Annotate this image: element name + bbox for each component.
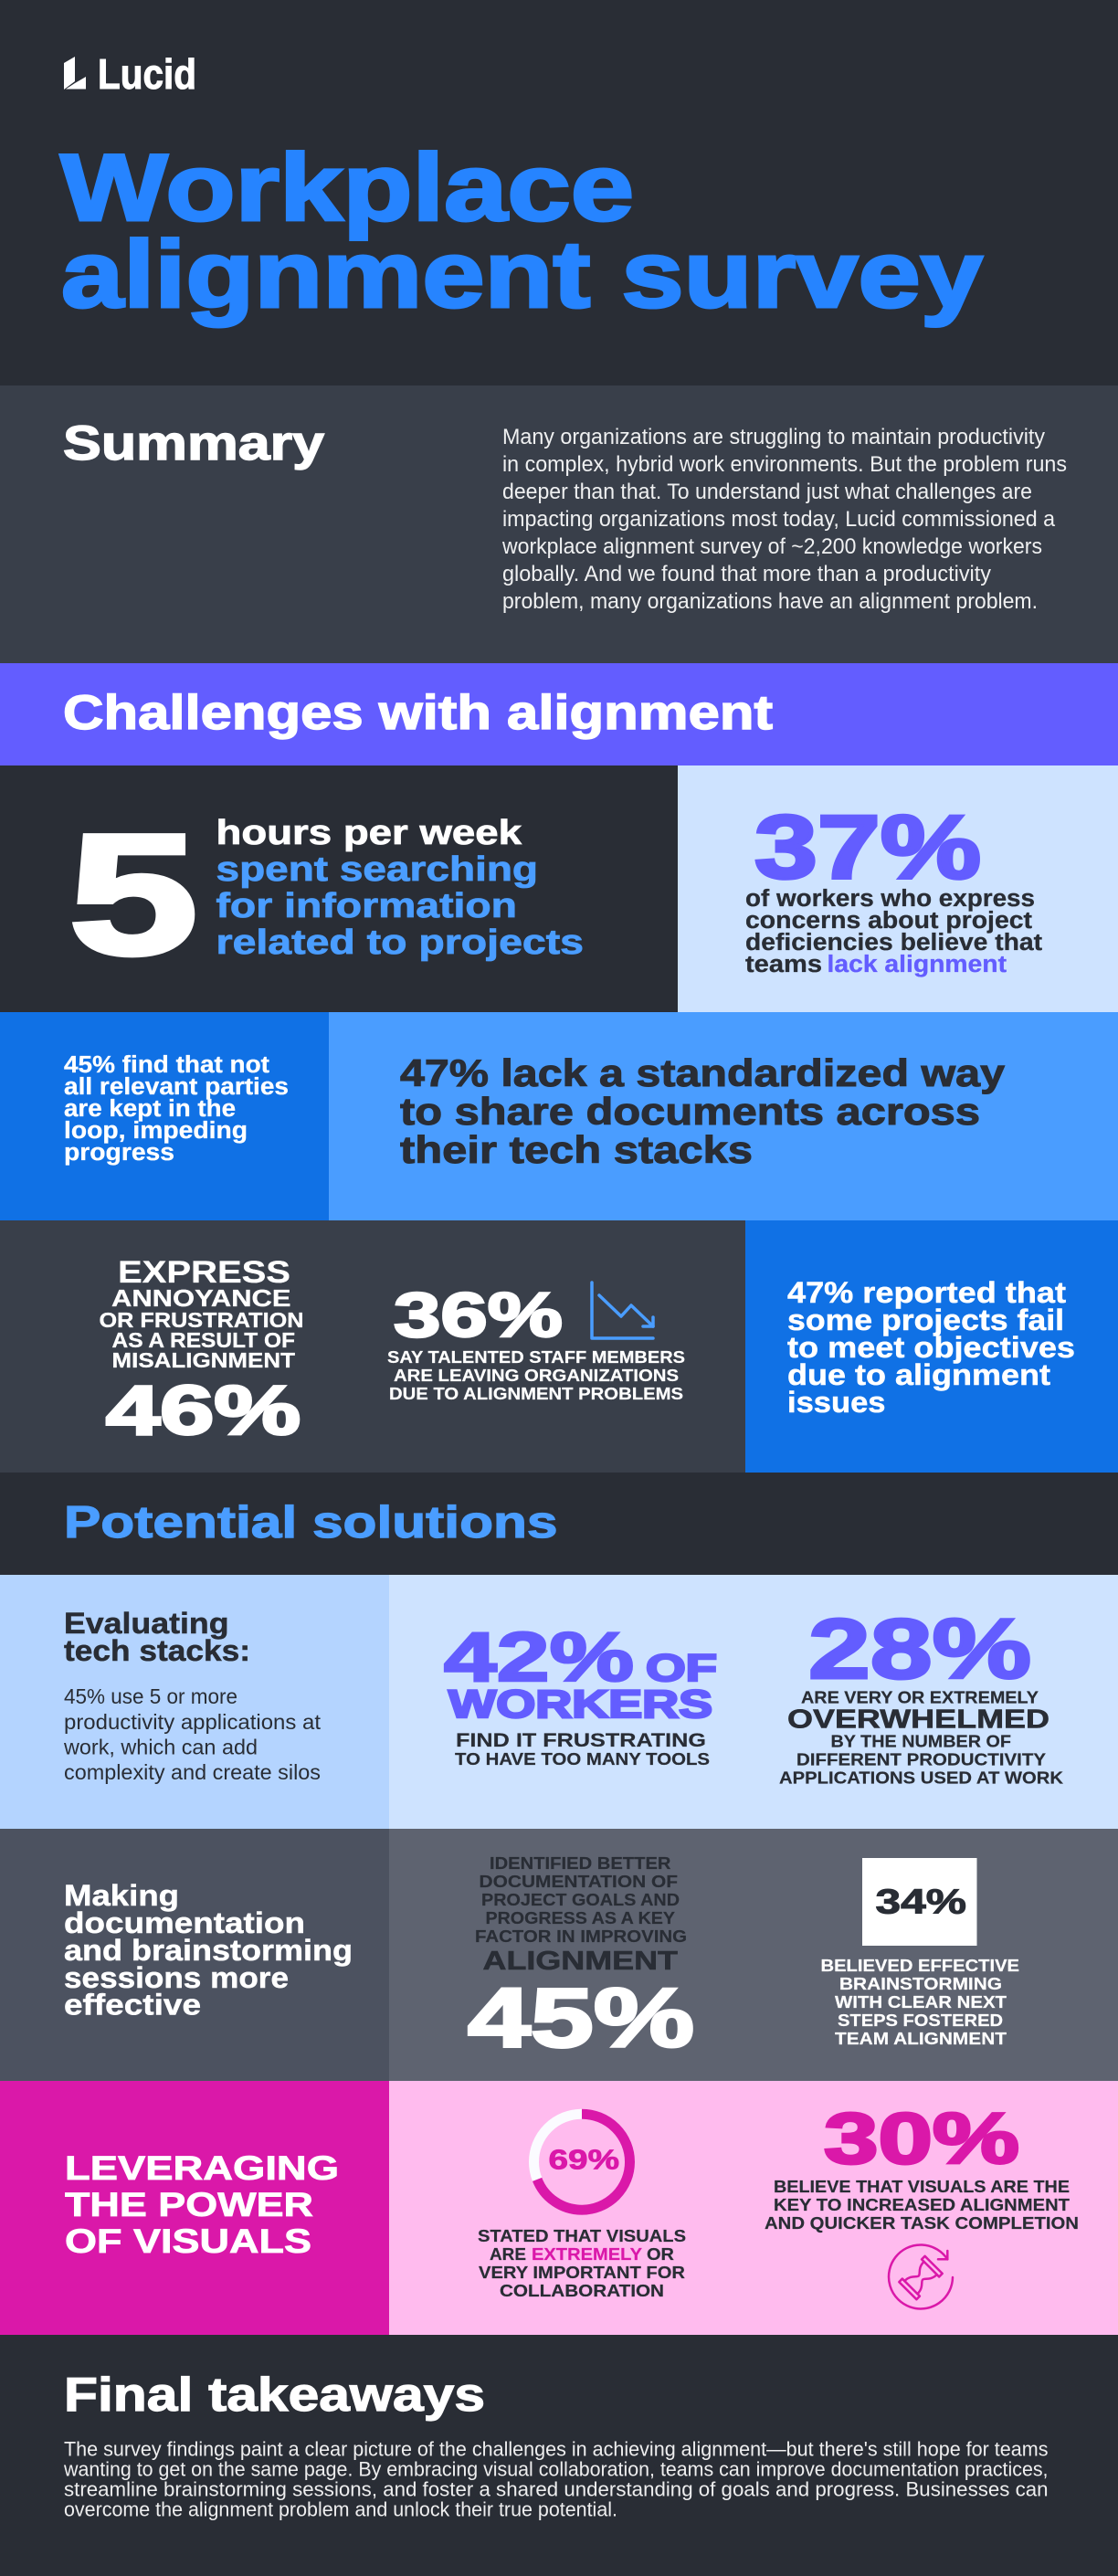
text: hours per week: hours per week xyxy=(216,814,522,852)
panel: misalignment stats xyxy=(0,1220,745,1473)
text: key to alignment: BELIEVE THAT VISUALS ARE THE xyxy=(774,2177,1070,2196)
text: lack alignment xyxy=(745,886,1043,977)
text: talented staff: SAY TALENTED STAFF MEMBERS xyxy=(387,1347,685,1367)
panel: final takeaways xyxy=(0,2335,1118,2576)
stat: 5: 5 xyxy=(69,798,198,990)
stat: 28%: 28% xyxy=(808,1601,1031,1696)
text: key to alignment xyxy=(765,2177,1079,2233)
text: hours per week xyxy=(216,814,584,962)
panel: 47 percent document sharing: 47% lack a standardized way xyxy=(400,1051,1006,1094)
text: better documentation: PROJECT GOALS AND xyxy=(481,1890,680,1909)
text: too many tools xyxy=(455,1729,710,1768)
takeaways text xyxy=(63,2437,1049,2521)
text: 5 or more applications: complexity and create silos xyxy=(64,1760,321,1784)
stat: 37%: 37% xyxy=(754,797,981,897)
panel: 47 percent projects fail: issues xyxy=(787,1386,886,1419)
takeaways text: The survey findings paint a clear picture of the challenges in achieving alignment—but there's still hope for teams xyxy=(64,2437,1049,2461)
logo: Lucid: Lucid xyxy=(98,50,196,98)
text: talented staff: ARE LEAVING ORGANIZATIONS xyxy=(394,1366,679,1385)
takeaways text: overcome the alignment problem and unlock their true potential. xyxy=(64,2497,617,2521)
text: better documentation: IDENTIFIED BETTER xyxy=(490,1853,670,1873)
panel: 47 percent projects fail: due to alignment xyxy=(787,1358,1050,1391)
panel: challenges heading xyxy=(0,663,1118,765)
heading: summary: Summary xyxy=(63,417,325,470)
panel: making documentation effective: sessions more xyxy=(64,1961,289,1994)
stat: 36%: 36% xyxy=(394,1280,563,1350)
text: lack alignment: deficiencies believe that xyxy=(745,930,1043,955)
text: visuals important: VERY IMPORTANT FOR xyxy=(479,2263,685,2282)
stat: 42% of workers: 42% xyxy=(444,1619,634,1696)
text: overwhelmed: DIFFERENT PRODUCTIVITY xyxy=(796,1750,1047,1768)
text: better documentation: PROGRESS AS A KEY xyxy=(486,1908,676,1927)
panel: leveraging the power of visuals: THE POWER xyxy=(65,2185,313,2223)
text: too many tools: FIND IT FRUSTRATING xyxy=(456,1729,706,1751)
summary text: deeper than that. To understand just what challenges are xyxy=(502,480,1032,504)
text: 5 or more applications xyxy=(63,1684,321,1784)
text: express annoyance: MISALIGNMENT xyxy=(111,1348,295,1372)
panel: making documentation effective xyxy=(0,1829,389,2081)
text: effective brainstorming: TEAM ALIGNMENT xyxy=(835,2029,1007,2048)
text: hours per week: related to projects xyxy=(216,924,584,962)
stat: 46%: 46% xyxy=(106,1372,301,1450)
panel: header xyxy=(0,0,1118,385)
text: hours per week: for information xyxy=(216,887,517,925)
text: better documentation: ALIGNMENT xyxy=(482,1947,679,1976)
panel: leveraging the power of visuals xyxy=(0,2081,389,2335)
text: 5 or more applications: productivity applications at xyxy=(64,1710,321,1734)
summary text: globally. And we found that more than a productivity xyxy=(502,562,991,586)
text: key to alignment: AND QUICKER TASK COMPLETION xyxy=(765,2213,1079,2233)
panel: 45 percent not in the loop: progress xyxy=(64,1140,174,1166)
text: overwhelmed: OVERWHELMED xyxy=(787,1705,1049,1734)
text: hours per week: spent searching xyxy=(216,850,538,889)
text: effective brainstorming: BELIEVED EFFECTIVE xyxy=(820,1956,1019,1975)
text: 5 or more applications: work, which can add xyxy=(63,1736,258,1759)
icon: hourglass with arrow xyxy=(889,2244,953,2308)
text: better documentation: DOCUMENTATION OF xyxy=(479,1872,678,1891)
summary text: problem, many organizations have an alignment problem. xyxy=(502,589,1038,614)
text: overwhelmed xyxy=(779,1688,1064,1787)
logo: Lucid xyxy=(64,50,196,98)
panel: making documentation effective: documentation xyxy=(64,1906,305,1939)
summary text: impacting organizations most today, Lucid commissioned a xyxy=(502,507,1056,532)
text: effective brainstorming: WITH CLEAR NEXT xyxy=(835,1992,1007,2011)
text: lack alignment: lack alignment xyxy=(828,952,1007,977)
panel: 47 percent document sharing: to share documents across xyxy=(400,1090,980,1133)
panel: challenges heading: Challenges with alignment xyxy=(63,686,773,740)
heading: evaluating tech stacks xyxy=(64,1607,250,1667)
panel: 5 hours per week xyxy=(0,765,678,1012)
summary text: Many organizations are struggling to maintain productivity xyxy=(502,425,1045,449)
text: visuals important xyxy=(478,2226,686,2300)
panel: 45 percent not in the loop: are kept in the xyxy=(64,1096,236,1122)
text: talented staff xyxy=(387,1347,685,1403)
panel: 45 percent not in the loop: loop, impeding xyxy=(64,1118,248,1144)
text: better documentation xyxy=(475,1853,687,1976)
text: lack alignment: of workers who express xyxy=(745,886,1035,912)
stat: 42% of workers xyxy=(444,1619,717,1726)
panel: 47 percent projects fail: 47% reported that xyxy=(787,1276,1066,1309)
stat: 45%: 45% xyxy=(468,1971,694,2064)
panel: making documentation effective: Making xyxy=(64,1879,179,1912)
panel: 47 percent document sharing xyxy=(329,1012,1118,1220)
takeaways text: wanting to get on the same page. By embracing visual collaboration, teams can improve documentation practices, xyxy=(63,2457,1049,2481)
panel: leveraging the power of visuals: LEVERAGING xyxy=(65,2148,339,2187)
title: Workplace xyxy=(60,135,634,241)
panel: visuals stats xyxy=(389,2081,1118,2335)
panel: 47 percent projects fail: some projects fail xyxy=(787,1304,1064,1336)
text: lack alignment: concerns about project xyxy=(745,908,1033,934)
panel: potential solutions heading xyxy=(0,1473,1118,1575)
text: better documentation: FACTOR IN IMPROVING xyxy=(475,1927,687,1946)
takeaways text: streamline brainstorming sessions, and foster a shared understanding of goals and progress. Businesses can xyxy=(64,2477,1049,2501)
summary text: in complex, hybrid work environments. But the problem runs xyxy=(502,452,1067,477)
panel: 47 percent projects fail xyxy=(745,1220,1118,1473)
text: lack alignment: teams xyxy=(745,952,822,977)
text: visuals important: ARE xyxy=(490,2244,526,2264)
panel: documentation and brainstorming stats xyxy=(389,1829,1118,2081)
panel: making documentation effective: and brainstorming xyxy=(64,1934,353,1967)
summary text: workplace alignment survey of ~2,200 knowledge workers xyxy=(501,534,1042,559)
summary text xyxy=(501,425,1067,614)
text: visuals important: OR xyxy=(647,2244,674,2264)
stat: 42% of workers: WORKERS xyxy=(448,1683,712,1726)
icon: declining chart xyxy=(592,1283,653,1338)
panel: 45 percent not in the loop: all relevant parties xyxy=(64,1074,289,1100)
heading: final takeaways: Final takeaways xyxy=(64,2369,485,2422)
text: 5 or more applications: 45% use 5 or more xyxy=(64,1684,237,1708)
text: express annoyance xyxy=(99,1255,303,1372)
stat: 34% box: 34% xyxy=(875,1884,966,1922)
panel: 45 percent not in the loop xyxy=(0,1012,329,1220)
panel: potential solutions heading: Potential solutions xyxy=(64,1498,557,1547)
panel: summary xyxy=(0,385,1118,663)
text: effective brainstorming: STEPS FOSTERED xyxy=(838,2011,1003,2030)
stat: 34% box xyxy=(862,1858,977,1946)
text: visuals important: STATED THAT VISUALS xyxy=(478,2226,686,2245)
text: key to alignment: KEY TO INCREASED ALIGNMENT xyxy=(774,2195,1071,2214)
panel: 37 percent xyxy=(678,765,1118,1012)
panel: 47 percent document sharing: their tech stacks xyxy=(400,1128,753,1171)
stat: 42% of workers: OF xyxy=(646,1646,717,1689)
panel: 47 percent projects fail: to meet objectives xyxy=(787,1331,1075,1364)
text: overwhelmed: ARE VERY OR EXTREMELY xyxy=(801,1688,1039,1706)
text: express annoyance: AS A RESULT OF xyxy=(111,1328,295,1352)
text: express annoyance: OR FRUSTRATION xyxy=(99,1308,303,1332)
text: overwhelmed: APPLICATIONS USED AT WORK xyxy=(779,1768,1064,1787)
text: effective brainstorming xyxy=(820,1956,1019,2048)
stat: 30%: 30% xyxy=(824,2097,1019,2179)
text: effective brainstorming: BRAINSTORMING xyxy=(839,1974,1002,1993)
panel: leveraging the power of visuals: OF VISUALS xyxy=(65,2222,311,2260)
text: talented staff: DUE TO ALIGNMENT PROBLEMS xyxy=(389,1384,683,1403)
heading: evaluating tech stacks: Evaluating xyxy=(64,1607,228,1640)
text: express annoyance: ANNOYANCE xyxy=(111,1284,290,1312)
panel: evaluating tech stacks xyxy=(0,1575,389,1829)
panel: 45 percent not in the loop: 45% find that not xyxy=(64,1052,270,1078)
panel: tool overload stats xyxy=(389,1575,1118,1829)
panel: making documentation effective: effective xyxy=(64,1988,201,2021)
chart: 69% donut: 69% xyxy=(548,2143,619,2176)
text: visuals important: EXTREMELY xyxy=(532,2244,643,2264)
text: too many tools: TO HAVE TOO MANY TOOLS xyxy=(455,1749,710,1768)
chart: 69% donut xyxy=(533,2114,630,2210)
text: overwhelmed: BY THE NUMBER OF xyxy=(831,1732,1011,1750)
title xyxy=(60,135,983,328)
heading: evaluating tech stacks: tech stacks: xyxy=(64,1634,250,1667)
text: express annoyance: EXPRESS xyxy=(118,1255,290,1290)
title: alignment survey xyxy=(61,222,983,328)
text: visuals important: COLLABORATION xyxy=(500,2281,664,2300)
